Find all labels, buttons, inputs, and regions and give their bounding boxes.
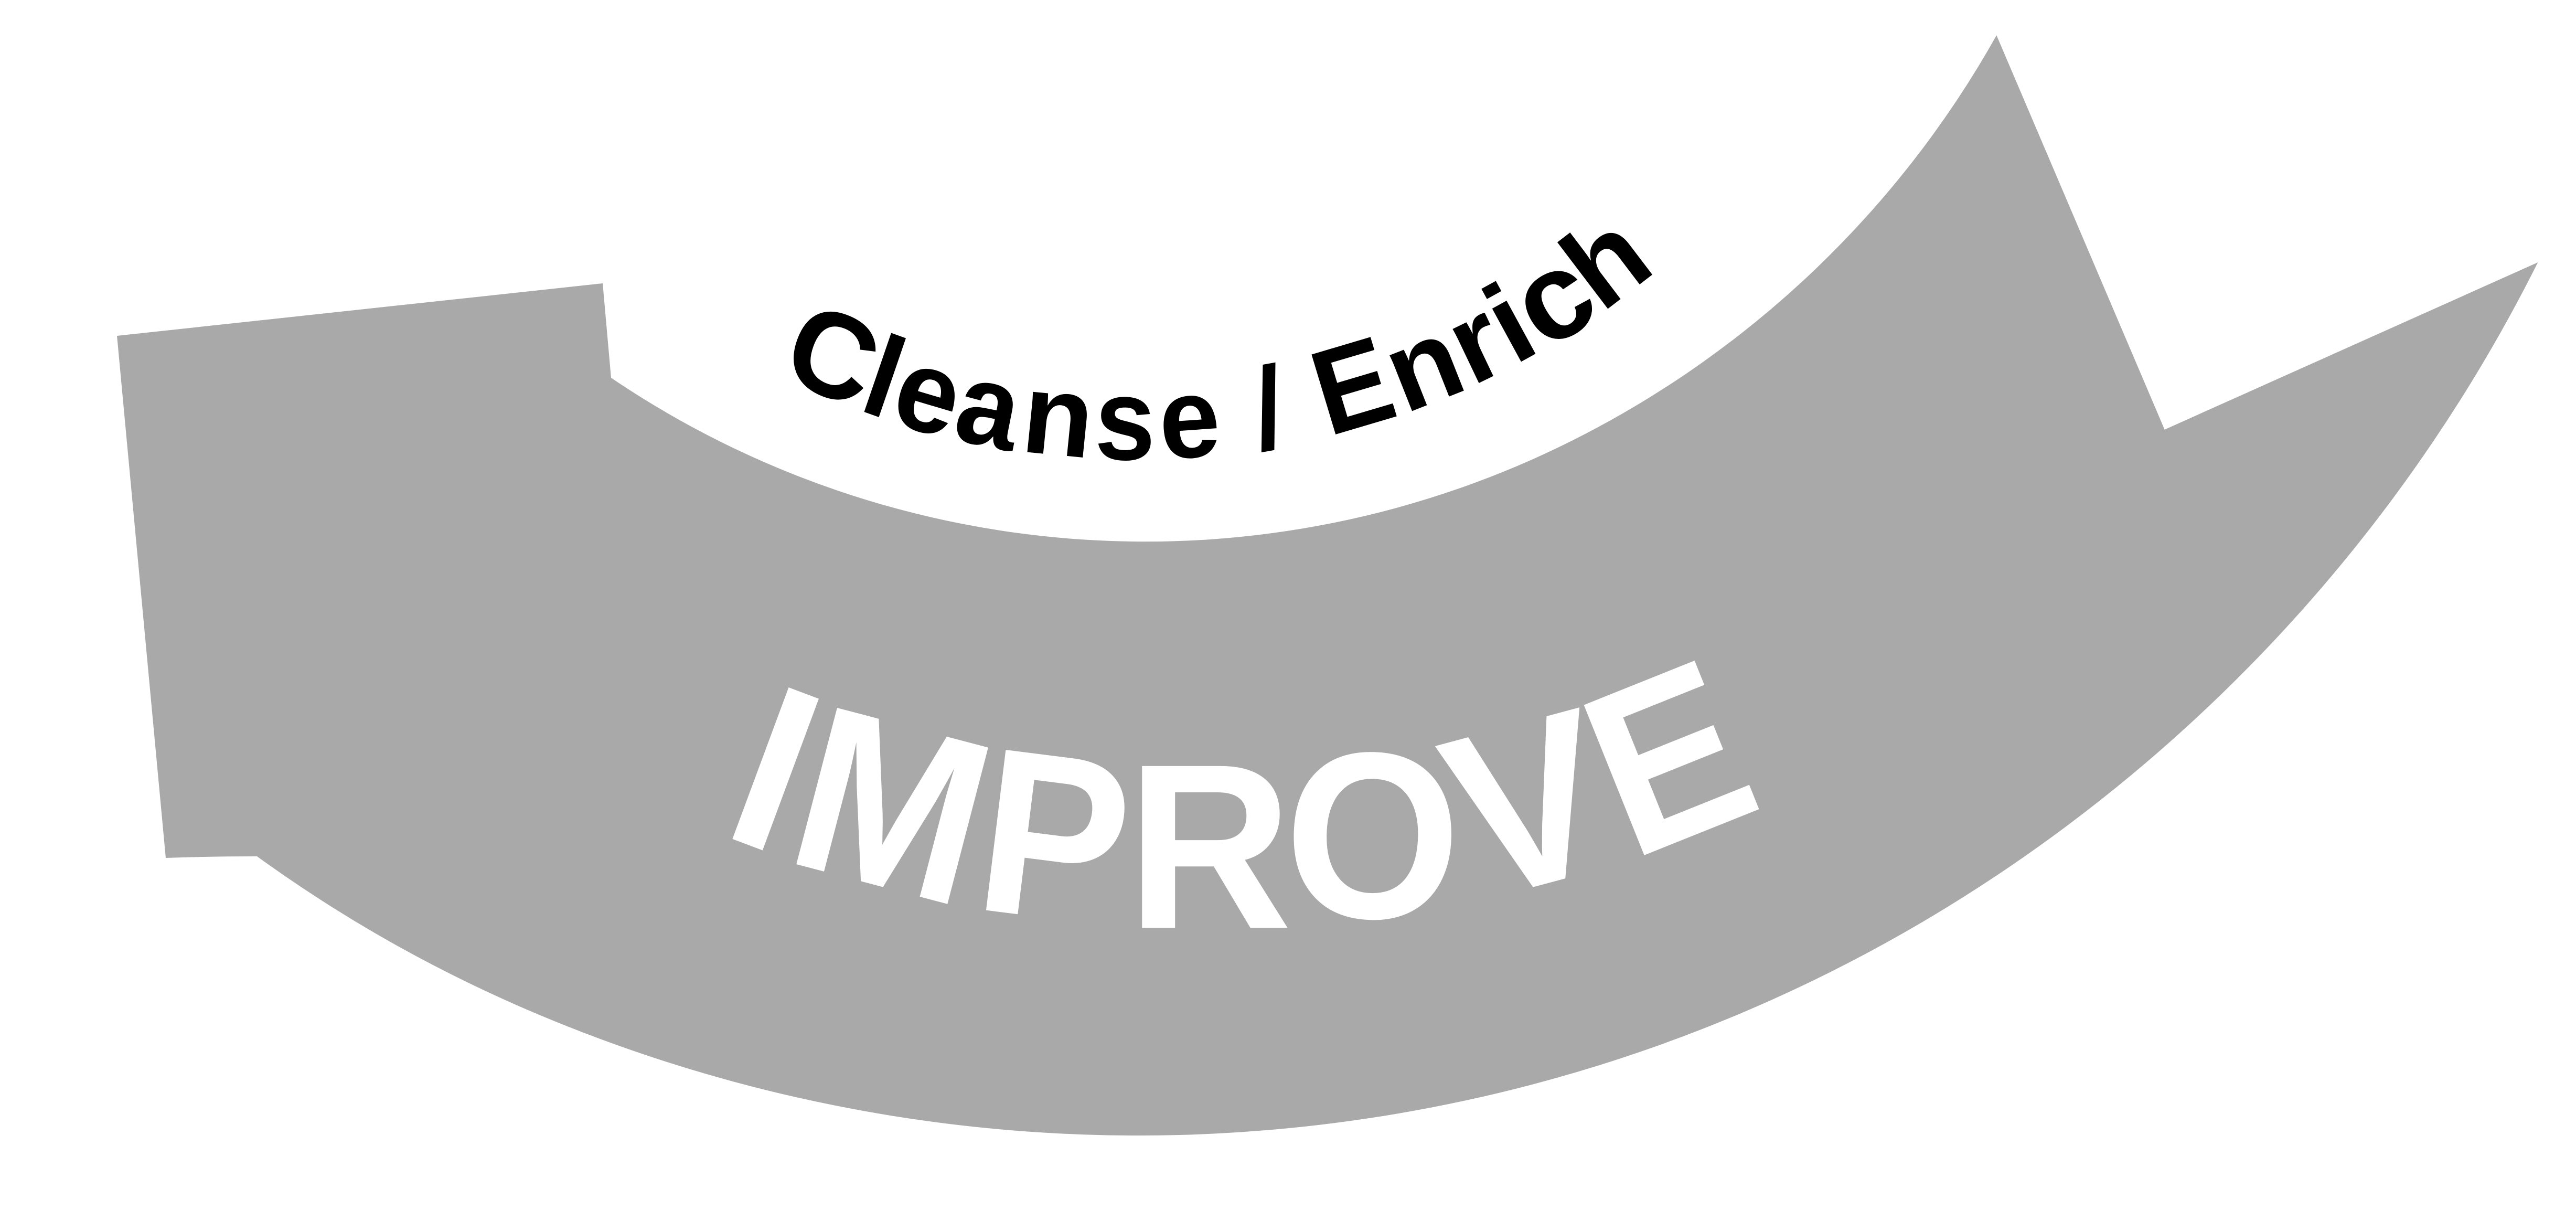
label: Cleanse / Enrich: / [1243, 342, 1295, 475]
label: Cleanse / Enrich [769, 188, 1673, 486]
heading: IMPROVE: O [1281, 701, 1465, 973]
label: Cleanse / Enrich: E [1297, 311, 1409, 462]
label: Cleanse / Enrich: c [1487, 221, 1618, 374]
label: Cleanse / Enrich: n [1367, 293, 1480, 437]
label: Cleanse / Enrich: s [1094, 354, 1157, 486]
heading: IMPROVE: I [700, 635, 850, 904]
label: Cleanse / Enrich: l [849, 311, 920, 444]
label: Cleanse / Enrich: h [1538, 188, 1673, 334]
label: Cleanse / Enrich: n [1017, 349, 1100, 483]
label: Cleanse / Enrich: e [1155, 353, 1224, 484]
label: Cleanse / Enrich: r [1427, 274, 1523, 409]
heading: IMPROVE [700, 609, 1787, 980]
label: Cleanse / Enrich: C [769, 275, 896, 435]
label: Cleanse / Enrich: e [881, 320, 977, 464]
label: Cleanse / Enrich: i [1465, 259, 1555, 388]
heading: IMPROVE: P [965, 698, 1143, 978]
heading: IMPROVE: V [1420, 659, 1637, 952]
label: Cleanse / Enrich: a [946, 336, 1033, 477]
heading: IMPROVE: E [1552, 609, 1787, 909]
heading: IMPROVE: R [1127, 716, 1292, 980]
heading: IMPROVE: M [769, 656, 1015, 958]
